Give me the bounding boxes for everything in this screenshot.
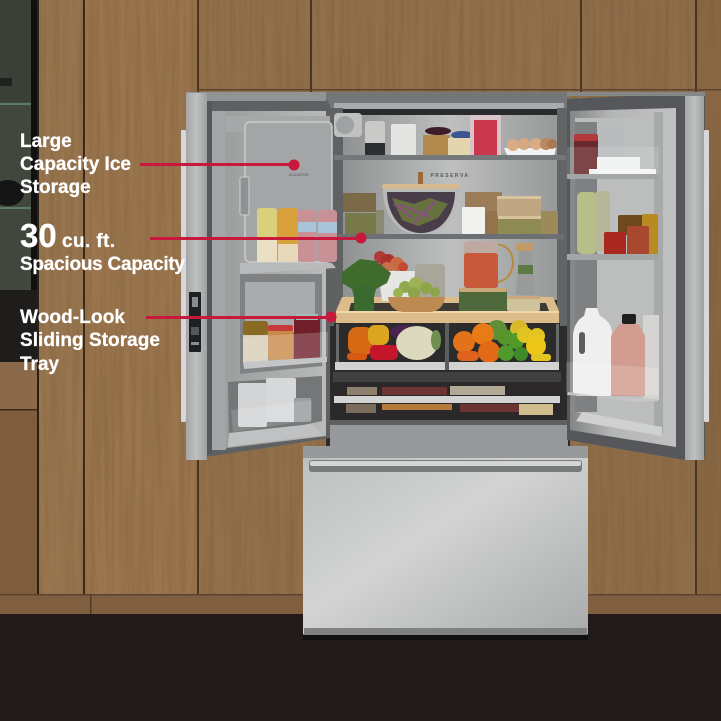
right crisper fruit [453,320,551,363]
soda cans [257,208,337,262]
callout: large capacity ice storage: Capacity Ice [20,154,131,175]
fruit bowl, herbs and grapes [342,251,445,312]
callout: wood-look sliding storage tray: Wood-Look [20,307,125,328]
base plinth and floor [0,594,721,721]
right bottom bin [566,362,659,396]
upper door shelf [240,263,336,274]
right door [566,92,709,460]
callout: 30 cu. ft. spacious capacity: 30 [20,217,57,254]
fridge interior cabinet [326,92,570,446]
milk jug [573,308,612,396]
middle glass shelf [338,234,564,239]
top shelf items [365,115,557,157]
ice storage bin [240,122,332,262]
left door [181,92,337,460]
right door liner [570,108,676,447]
callout: wood-look sliding storage tray [20,307,336,375]
salad bowl [382,172,460,235]
left crisper vegetables [347,325,441,360]
callout: 30 cu. ft. spacious capacity [20,217,366,275]
crisper drawers [334,320,560,372]
ice storage bin: ALKASTOR [289,173,309,177]
callout: wood-look sliding storage tray: Sliding Storage [20,330,160,351]
callout: wood-look sliding storage tray: Tray [20,354,60,375]
right top shelf items [567,121,659,177]
lower bin recess [228,376,322,441]
lower recess [240,274,322,374]
callout: large capacity ice storage: Large [20,131,72,152]
middle shelf items [343,192,558,235]
callout: 30 cu. ft. spacious capacity: Spacious Capacity [20,254,185,275]
yogurt tubs [231,378,312,432]
pitcher and carafe [464,241,535,295]
callout: large capacity ice storage: Storage [20,177,91,198]
left door liner [212,111,326,450]
left open shelving niche [0,0,39,594]
brand label on back wall: PRESERVA [430,173,470,179]
bottom freezer drawer [303,446,588,635]
top glass shelf [334,155,566,160]
icemaker dial [334,113,362,137]
callout: large capacity ice storage [20,131,300,198]
right door handle [704,130,709,422]
left door handle [181,130,186,422]
lidded food containers [459,288,540,311]
right middle shelf items [577,191,658,258]
wood-look sliding tray [336,297,559,323]
pantry drawer [333,372,561,420]
crisper fronts [335,323,559,370]
carton and juice bottle [611,314,659,400]
control panel [189,292,201,352]
drawer handle [309,460,582,472]
door shelf jars [243,314,328,363]
callout: 30 cu. ft. spacious capacity: cu. ft. [62,231,115,252]
